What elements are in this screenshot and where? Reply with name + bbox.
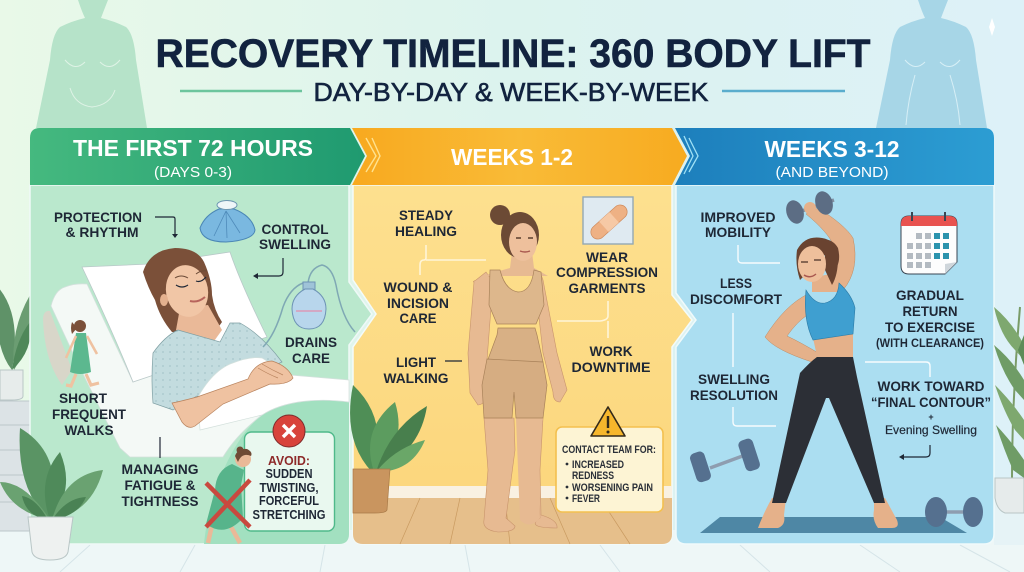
panel: weeks 3-12 (675, 128, 994, 544)
panel header (30, 128, 365, 185)
label: work downtime (572, 343, 650, 375)
icon: warning triangle (591, 407, 625, 436)
callout: avoid: SUDDEN (266, 467, 312, 481)
label: control swelling: CONTROL (262, 221, 329, 237)
label: short frequent walks: WALKS (64, 422, 114, 438)
connector lines (733, 245, 930, 426)
panel: weeks 1-2 (350, 128, 692, 544)
icon: small walking patient (66, 320, 99, 386)
panel header: THE FIRST 72 HOURS (73, 135, 313, 161)
label: gradual return to exercise: GRADUAL (896, 287, 964, 303)
label: steady healing (395, 207, 457, 239)
label: managing fatigue: MANAGING (122, 461, 199, 477)
subtitle: DAY-BY-DAY & WEEK-BY-WEEK (314, 77, 709, 107)
label: final contour (871, 378, 991, 437)
panel header: WEEKS 1-2 (451, 144, 573, 170)
arrow: control swelling (253, 258, 283, 279)
icon: bending patient crossed out (206, 446, 252, 543)
label: short frequent walks: FREQUENT (52, 406, 126, 422)
label: protection and rhythm: & RHYTHM (66, 224, 138, 240)
callout: contact team: INCREASED (572, 459, 624, 471)
connector: managing fatigue (159, 437, 161, 458)
connector lines (420, 245, 608, 338)
label: work downtime: WORK (590, 343, 632, 359)
arrow: protection (155, 217, 178, 238)
label: final contour: “FINAL CONTOUR” (871, 394, 991, 410)
plant: upper left (0, 287, 32, 400)
callout: contact team: CONTACT TEAM FOR: (562, 444, 656, 456)
label: less discomfort (690, 275, 782, 307)
plant: lower left (0, 428, 103, 560)
label: wound and incision care: INCISION (387, 295, 449, 311)
label: wound and incision care: CARE (400, 310, 436, 326)
label: managing fatigue: FATIGUE & (124, 477, 196, 493)
label: swelling resolution: SWELLING (698, 371, 770, 387)
icon: bandage package (583, 197, 633, 244)
callout: contact team: WORSENING PAIN (572, 482, 653, 494)
icon: surgical drain (263, 265, 355, 347)
silhouette: before body (36, 0, 147, 128)
label: final contour: WORK TOWARD (878, 378, 984, 394)
label: control swelling: SWELLING (259, 236, 331, 252)
label: swelling resolution: RESOLUTION (690, 387, 778, 403)
panel header: WEEKS 3-12 (764, 136, 900, 162)
callout: avoid: TWISTING, (260, 481, 318, 495)
exercise mat (700, 517, 967, 533)
label: managing fatigue: TIGHTNESS (122, 493, 198, 509)
label: less discomfort: DISCOMFORT (690, 291, 782, 307)
label: steady healing: HEALING (395, 223, 457, 239)
panel body (30, 185, 372, 544)
label: control swelling (259, 221, 331, 252)
connector: light walking (445, 360, 462, 362)
callout: avoid: FORCEFUL (259, 494, 319, 508)
label: drains care: CARE (292, 350, 330, 366)
icon: calendar (901, 212, 957, 274)
label: improved mobility (700, 209, 776, 240)
label: gradual return to exercise: RETURN (902, 303, 958, 319)
label: drains care: DRAINS (285, 334, 337, 350)
label: wear compression garments: WEAR (586, 249, 628, 265)
panel header: (AND BEYOND) (776, 164, 888, 181)
label: light walking: WALKING (384, 370, 449, 386)
plant: right palm (994, 307, 1024, 513)
arrow: evening swelling (899, 445, 930, 460)
label: drains care (285, 334, 337, 366)
label: improved mobility: IMPROVED (700, 209, 776, 225)
label: wound and incision care (384, 279, 452, 326)
label: steady healing: STEADY (399, 207, 454, 223)
panel body (676, 185, 994, 544)
icon: floor dumbbell left (689, 437, 761, 483)
panel: first 72 hours (30, 128, 372, 544)
label: gradual return to exercise: TO EXERCISE (885, 319, 975, 335)
illustration: patient in bed (43, 248, 349, 457)
label: swelling resolution (690, 371, 778, 403)
label: final contour: + (928, 412, 934, 422)
label: managing fatigue (122, 461, 199, 509)
callout: contact team: FEVER (572, 493, 600, 505)
label: protection and rhythm: PROTECTION (54, 209, 142, 225)
label: protection and rhythm (54, 209, 142, 240)
panel header (352, 128, 687, 185)
icon: floor dumbbell right (925, 497, 983, 527)
label: improved mobility: MOBILITY (705, 224, 772, 240)
icon: raised dumbbell (783, 189, 836, 226)
label: final contour: Evening Swelling (885, 423, 977, 437)
callout: avoid (244, 415, 334, 531)
callout: contact team: REDNESS (572, 470, 614, 482)
label: wear compression garments (556, 249, 658, 296)
plant (350, 385, 427, 513)
illustration: exercising woman (758, 208, 898, 528)
label: wear compression garments: COMPRESSION (556, 264, 658, 280)
label: work downtime: DOWNTIME (572, 359, 650, 375)
label: wear compression garments: GARMENTS (568, 280, 646, 296)
panel header: (DAYS 0-3) (154, 164, 232, 181)
drawers (0, 401, 30, 531)
callout: avoid: AVOID: (268, 454, 310, 468)
floor (353, 486, 672, 544)
label: short frequent walks: SHORT (59, 390, 107, 406)
panel body (353, 185, 692, 544)
label: light walking (384, 354, 449, 386)
icon: ice pack (200, 200, 255, 242)
shaded corner (204, 399, 349, 544)
silhouette: after body (876, 0, 987, 128)
label: light walking: LIGHT (396, 354, 436, 370)
illustration: woman in compression garment (468, 205, 567, 532)
label: wound and incision care: WOUND & (384, 279, 452, 295)
panel header (675, 128, 994, 185)
title: RECOVERY TIMELINE: 360 BODY LIFT (156, 32, 870, 76)
label: less discomfort: LESS (720, 275, 752, 291)
callout: avoid: STRETCHING (252, 508, 326, 522)
label: gradual return to exercise: (WITH CLEARANCE) (876, 336, 984, 350)
callout: contact team (556, 407, 663, 512)
icon: sparkle (989, 18, 995, 36)
label: gradual return to exercise (876, 287, 984, 350)
label: short frequent walks (52, 390, 126, 438)
